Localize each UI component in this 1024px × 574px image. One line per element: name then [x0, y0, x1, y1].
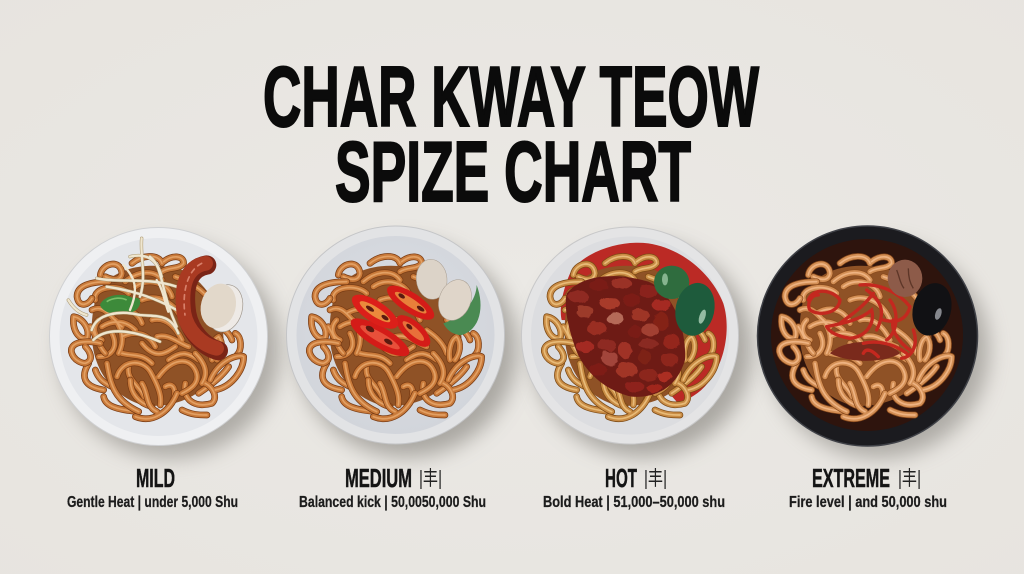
label: extreme: Fire level | and 50,000 shu — [789, 494, 947, 511]
title: SPIZE CHART — [335, 125, 691, 220]
label: mild: MILD — [136, 463, 175, 493]
icon: medium toppings — [346, 258, 481, 363]
label: medium — [299, 463, 486, 511]
label: hot: HOT — [605, 463, 637, 493]
label: extreme: EXTREME — [812, 463, 890, 493]
panel: extreme plate — [758, 226, 989, 458]
icon: red sauce — [561, 243, 727, 403]
panel: mild plate — [50, 228, 280, 458]
icon: meat sauce and olives — [566, 266, 719, 397]
label: extreme — [789, 463, 947, 511]
icon: mild toppings — [68, 238, 248, 351]
label: medium: MEDIUM — [345, 463, 412, 493]
label: hot: Bold Heat | 51,000–50,000 shu — [543, 494, 725, 511]
label: hot — [543, 463, 725, 511]
label: medium: Balanced kick | 50,0050,000 Shu — [299, 494, 486, 511]
label: medium: |丰| — [419, 467, 442, 490]
label: mild: Gentle Heat | under 5,000 Shu — [67, 494, 238, 511]
panel: hot plate — [522, 227, 752, 457]
icon: extreme toppings — [808, 260, 957, 361]
label: hot: |丰| — [644, 467, 667, 490]
panel: medium plate — [286, 226, 517, 457]
label: mild — [67, 463, 238, 511]
title — [263, 50, 759, 220]
label: extreme: |丰| — [898, 467, 921, 490]
